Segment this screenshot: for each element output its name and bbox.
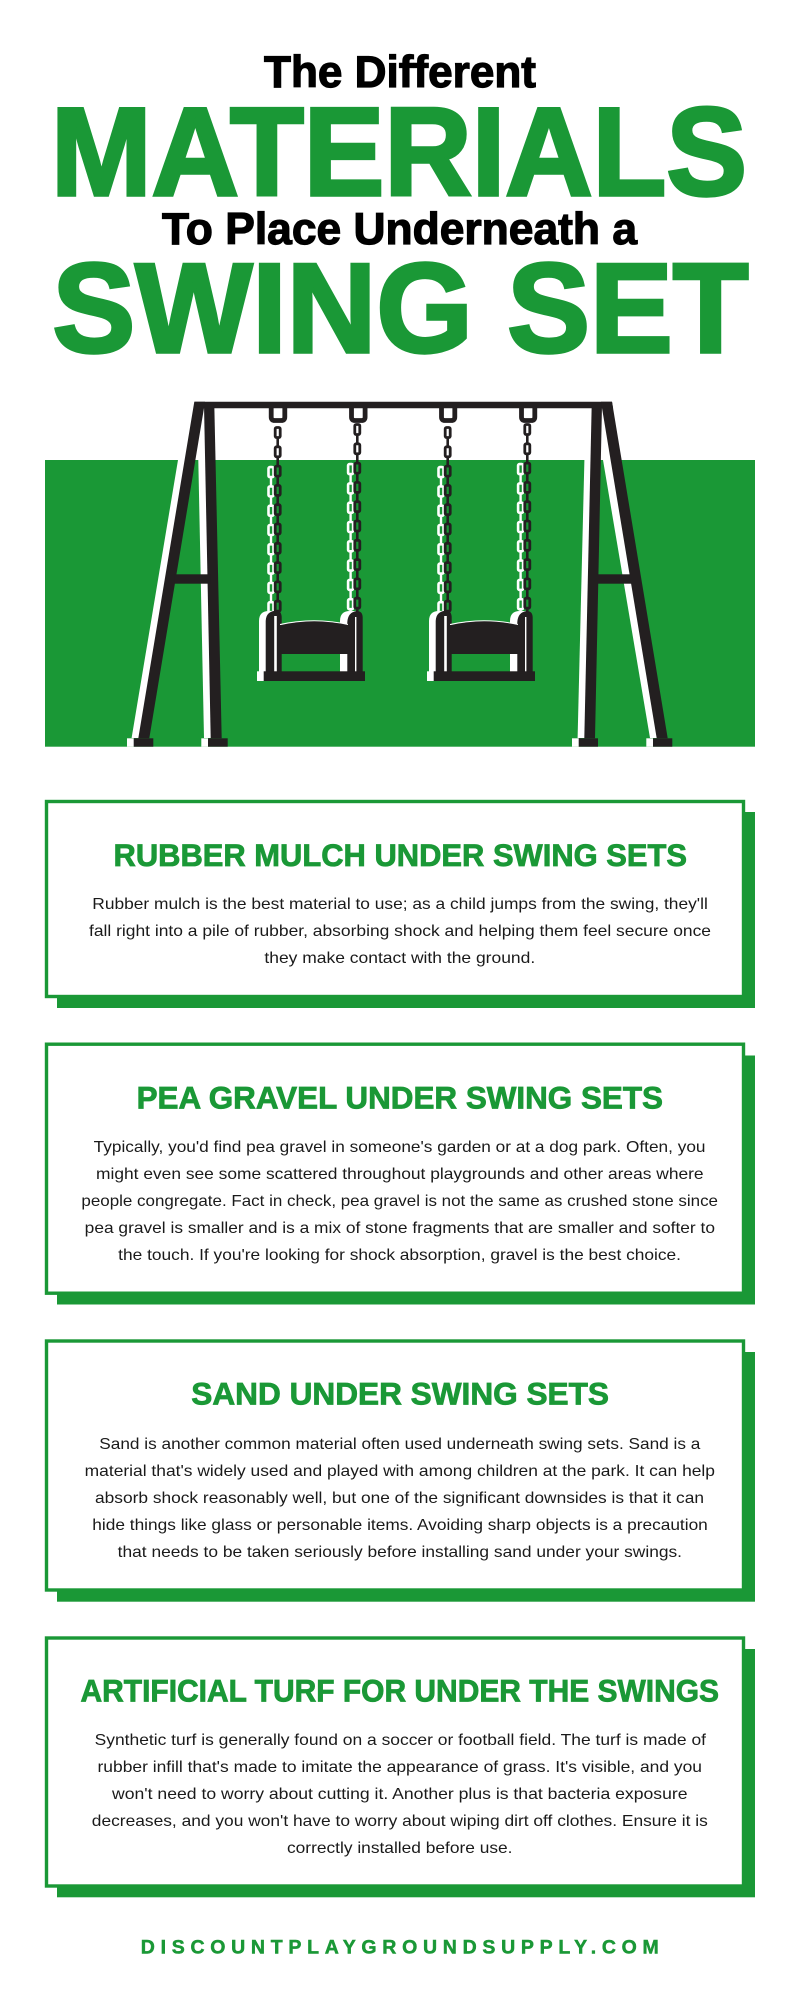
body text: Rubber mulch is the best material to use; as a child jumps from the swing, they'll: [92, 896, 708, 913]
heading: SAND UNDER SWING SETS: [191, 1376, 609, 1412]
panel: pea gravel: [46, 1044, 755, 1304]
body text: people congregate. Fact in check, pea gravel is not the same as crushed stone since: [81, 1193, 718, 1210]
title: The Different: The Different: [264, 48, 536, 97]
panel shadow: [57, 1649, 755, 1897]
panel: artificial turf: [46, 1638, 755, 1897]
panel shadow: [57, 1056, 755, 1304]
body text: that needs to be taken seriously before installing sand under your swings.: [118, 1544, 682, 1561]
green background panel: [45, 460, 755, 747]
body text: might even see some scattered throughout playgrounds and other areas where: [96, 1166, 704, 1183]
footer: website: DISCOUNTPLAYGROUNDSUPPLY.COM: [141, 1937, 659, 1959]
body text: Typically, you'd find pea gravel in someone's garden or at a dog park. Often, you: [94, 1139, 705, 1156]
body text: rubber infill that's made to imitate the appearance of grass. It's visible, and you: [98, 1759, 702, 1776]
body text: [81, 1139, 718, 1264]
body text: hide things like glass or personable items. Avoiding sharp objects is a precaution: [92, 1517, 708, 1534]
heading: RUBBER MULCH UNDER SWING SETS: [114, 837, 687, 873]
body text: the touch. If you're looking for shock absorption, gravel is the best choice.: [118, 1247, 681, 1264]
body text: pea gravel is smaller and is a mix of stone fragments that are smaller and softer to: [85, 1220, 715, 1237]
white shadows of frame legs: [127, 460, 661, 747]
body text: absorb shock reasonably well, but one of the significant downsides is that it can: [95, 1490, 704, 1507]
body text: [89, 896, 711, 967]
illustration: swing set on green panel: [45, 402, 755, 747]
panel shadow: [57, 1352, 755, 1602]
body text: correctly installed before use.: [287, 1840, 512, 1857]
panel: sand: [46, 1341, 755, 1602]
panel shadow: [57, 812, 755, 1008]
hanging brackets: [271, 408, 535, 420]
panel frame: [46, 1044, 744, 1293]
body text: [85, 1436, 715, 1561]
body text: they make contact with the ground.: [264, 950, 535, 967]
swing frame: [134, 402, 672, 747]
title: SWING SET: SWING SET: [52, 237, 748, 379]
title: To Place Underneath a: To Place Underneath a: [162, 205, 638, 254]
body text: Sand is another common material often used underneath swing sets. Sand is a: [99, 1436, 700, 1453]
body text: fall right into a pile of rubber, absorbing shock and helping them feel secure once: [89, 923, 711, 940]
right swing with chains: [427, 424, 535, 681]
title: MATERIALS: MATERIALS: [51, 83, 747, 222]
left swing with chains: [257, 424, 365, 681]
body text: [92, 1732, 708, 1857]
panel frame: [46, 1638, 744, 1886]
body text: won't need to worry about cutting it. Another plus is that bacteria exposure: [111, 1786, 688, 1803]
heading: ARTIFICIAL TURF FOR UNDER THE SWINGS: [80, 1673, 719, 1709]
heading: PEA GRAVEL UNDER SWING SETS: [137, 1080, 663, 1116]
body text: decreases, and you won't have to worry about wiping dirt off clothes. Ensure it is: [92, 1813, 708, 1830]
panel frame: [46, 1341, 744, 1590]
panel frame: [46, 802, 744, 996]
body text: material that's widely used and played with among children at the park. It can help: [85, 1463, 715, 1480]
body text: Synthetic turf is generally found on a soccer or football field. The turf is made of: [95, 1732, 707, 1749]
panel: rubber mulch: [46, 802, 755, 1008]
